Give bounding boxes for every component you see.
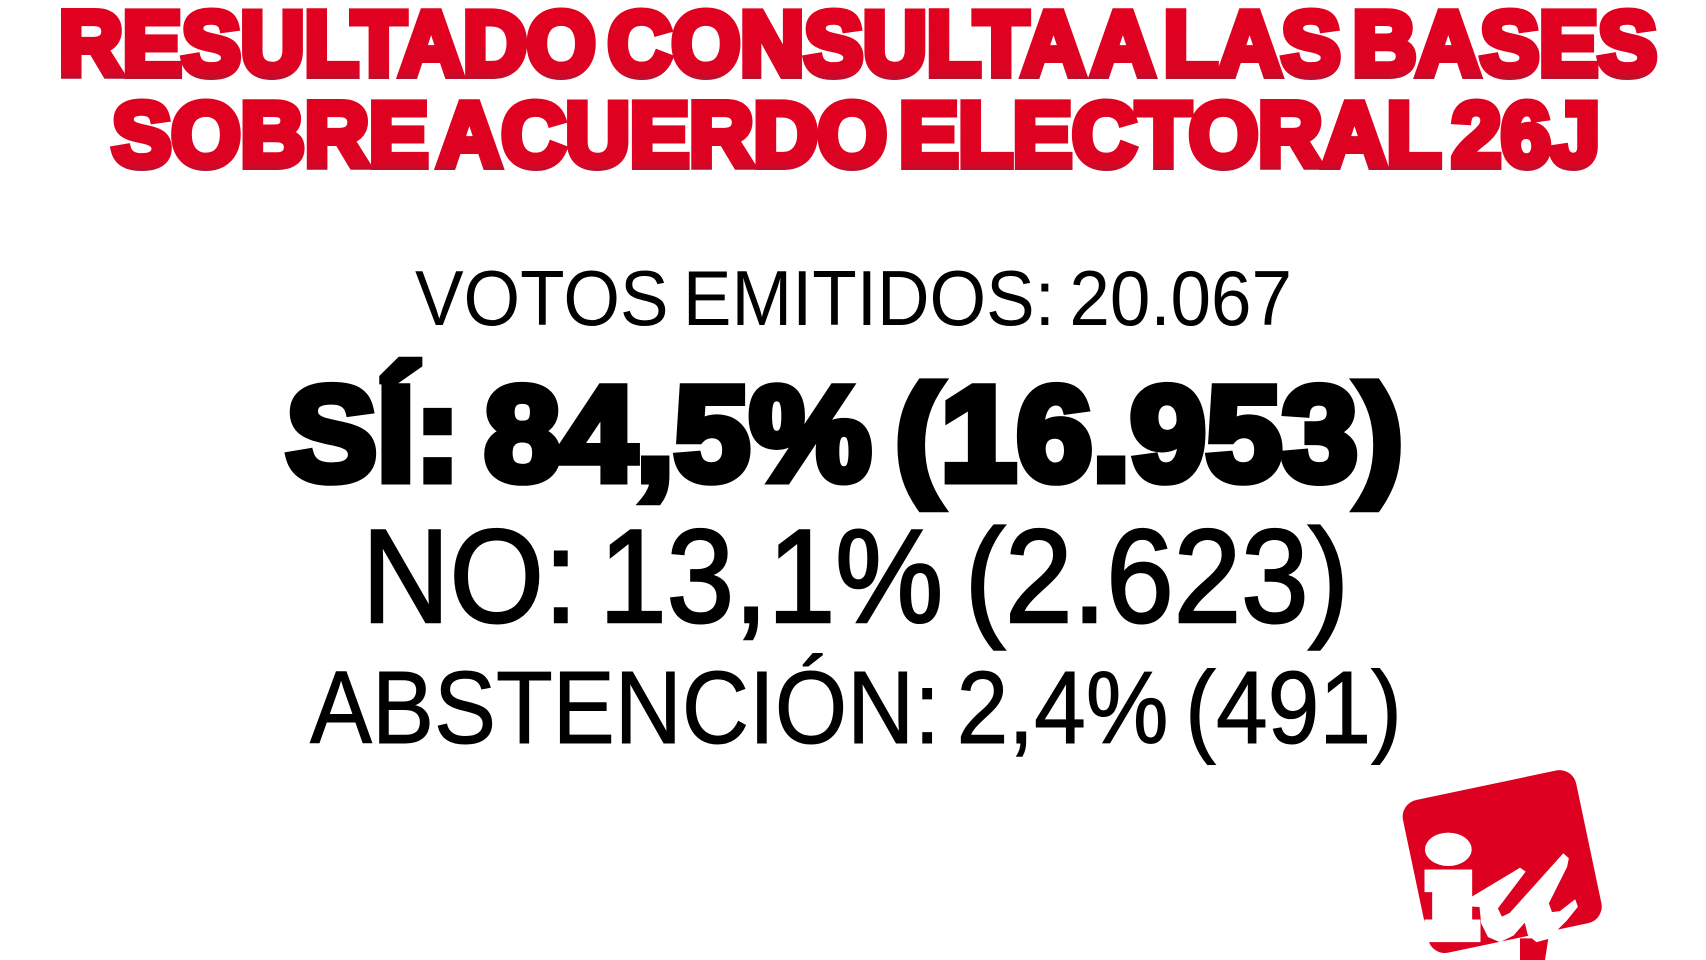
title	[59, 0, 1657, 186]
results block	[286, 254, 1403, 765]
yes result: SÍ: 84,5% (16.953)	[286, 360, 1403, 509]
title line 2: SOBRE ACUERDO ELECTORAL 26J	[112, 85, 1600, 186]
votes cast: VOTOS EMITIDOS: 20.067	[415, 254, 1292, 342]
abstention result: ABSTENCIÓN: 2,4% (491)	[310, 650, 1402, 765]
icon: IU logo	[1400, 767, 1605, 960]
no result: NO: 13,1% (2.623)	[362, 503, 1349, 651]
